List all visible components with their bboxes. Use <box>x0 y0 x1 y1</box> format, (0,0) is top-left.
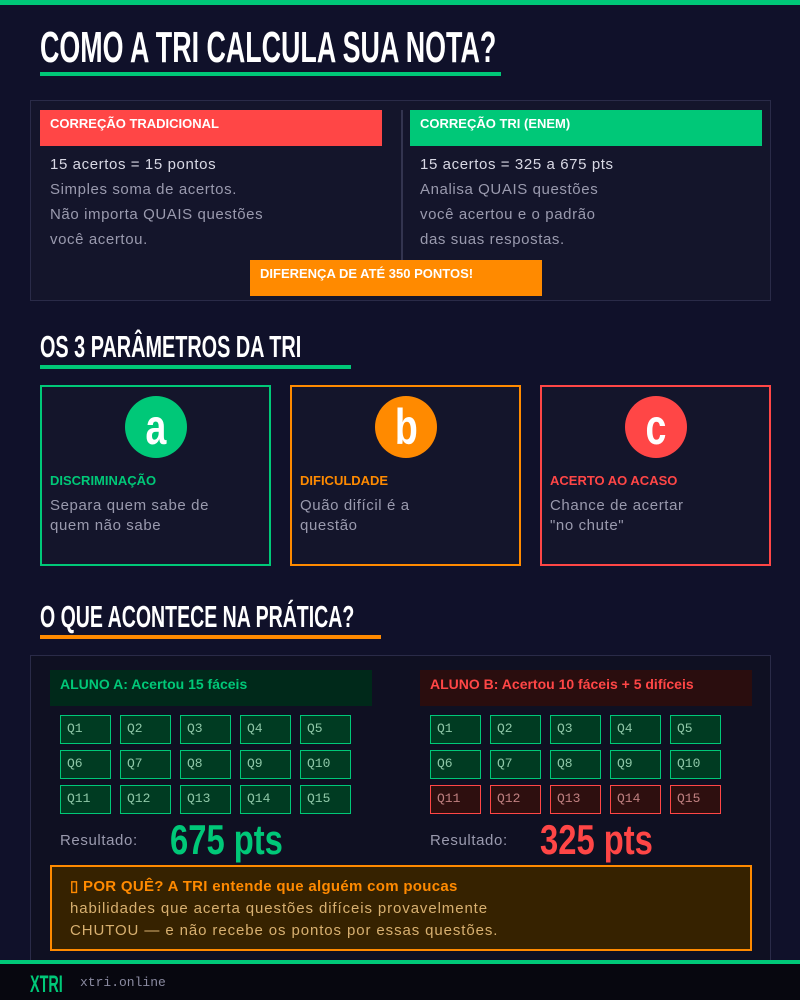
grid: aluno B: Q4 <box>617 721 633 736</box>
card: a: Separa quem sabe de <box>50 497 209 514</box>
grid: aluno B: Q9 <box>617 756 633 771</box>
result: aluno A: 675 pts <box>170 816 283 863</box>
header: TRI <box>410 110 762 146</box>
header: traditional: CORREÇÃO TRADICIONAL <box>50 116 219 131</box>
grid: aluno B: Q11 <box>437 791 460 806</box>
grid: aluno A: Q2 <box>127 721 143 736</box>
footer: xtri.online <box>80 975 166 990</box>
card: a: quem não sabe <box>50 517 161 534</box>
header: aluno A <box>50 670 372 706</box>
grid: aluno A: Q12 <box>127 791 150 806</box>
callout: why: habilidades que acerta questões difíceis provavelmente <box>70 900 488 917</box>
text: TRI: você acertou e o padrão <box>420 206 596 223</box>
grid: aluno B: Q1 <box>437 721 453 736</box>
text: TRI: das suas respostas. <box>420 231 565 248</box>
text: traditional: Não importa QUAIS questões <box>50 206 263 223</box>
callout: difference <box>250 260 542 296</box>
result: aluno B: Resultado: <box>430 832 508 849</box>
card: c <box>540 385 771 566</box>
card: b: Quão difícil é a <box>300 497 410 514</box>
grid: aluno B: Q15 <box>677 791 700 806</box>
footer: XTRI <box>30 971 63 998</box>
header: aluno A: ALUNO A: Acertou 15 fáceis <box>60 676 247 692</box>
icon: c <box>625 396 687 458</box>
text: traditional: você acertou. <box>50 231 148 248</box>
grid: aluno A: Q6 <box>67 756 83 771</box>
card: b: DIFICULDADE <box>300 473 388 488</box>
grid: aluno A: Q4 <box>247 721 263 736</box>
card: c: Chance de acertar <box>550 497 684 514</box>
text: TRI <box>420 156 614 248</box>
heading: parameters: OS 3 PARÂMETROS DA TRI <box>40 329 301 364</box>
text: traditional: 15 acertos = 15 pontos <box>50 156 216 173</box>
grid: aluno A: Q11 <box>67 791 90 806</box>
text: TRI: Analisa QUAIS questões <box>420 181 598 198</box>
grid: aluno A: Q3 <box>187 721 203 736</box>
grid: aluno A: Q10 <box>307 756 330 771</box>
card: b <box>290 385 521 566</box>
result: aluno B: 325 pts <box>540 816 653 863</box>
card: a: DISCRIMINAÇÃO <box>50 473 156 488</box>
grid: aluno B: Q10 <box>677 756 700 771</box>
icon: b <box>375 396 437 458</box>
grid: aluno B: Q12 <box>497 791 520 806</box>
footer <box>0 960 800 1000</box>
grid: aluno A: Q8 <box>187 756 203 771</box>
callout: difference: DIFERENÇA DE ATÉ 350 PONTOS! <box>260 266 473 281</box>
grid: aluno B: Q8 <box>557 756 573 771</box>
grid: aluno A: Q9 <box>247 756 263 771</box>
grid: aluno B: Q14 <box>617 791 640 806</box>
grid: aluno A: Q5 <box>307 721 323 736</box>
grid: aluno A: Q13 <box>187 791 210 806</box>
result: aluno A: Resultado: <box>60 832 138 849</box>
callout: why <box>50 865 752 951</box>
text: traditional <box>50 156 263 248</box>
grid: aluno B: Q13 <box>557 791 580 806</box>
grid: aluno A: Q1 <box>67 721 83 736</box>
card: b: questão <box>300 517 358 534</box>
grid: aluno A: Q7 <box>127 756 143 771</box>
card: c: "no chute" <box>550 517 624 534</box>
panel: comparison <box>30 100 771 301</box>
grid: aluno A <box>60 715 351 814</box>
grid: aluno B: Q5 <box>677 721 693 736</box>
icon: a: a <box>146 399 166 455</box>
grid: aluno B <box>430 715 721 814</box>
card: c: ACERTO AO ACASO <box>550 473 677 488</box>
header: traditional <box>40 110 382 146</box>
icon: a <box>125 396 187 458</box>
header: TRI: CORREÇÃO TRI (ENEM) <box>420 116 570 131</box>
grid: aluno B: Q7 <box>497 756 513 771</box>
result: aluno A <box>60 816 283 863</box>
title: COMO A TRI CALCULA SUA NOTA? <box>40 23 496 72</box>
icon: c: c <box>646 399 666 455</box>
grid: aluno B: Q2 <box>497 721 513 736</box>
callout: why: CHUTOU — e não recebe os pontos por essas questões. <box>70 922 498 939</box>
grid: aluno A: Q15 <box>307 791 330 806</box>
header: aluno B: ALUNO B: Acertou 10 fáceis + 5 difíceis <box>430 676 694 692</box>
text: TRI: 15 acertos = 325 a 675 pts <box>420 156 614 173</box>
panel: practice <box>30 655 771 975</box>
icon: b: b <box>395 399 417 455</box>
result: aluno B <box>430 816 653 863</box>
text: traditional: Simples soma de acertos. <box>50 181 237 198</box>
grid: aluno B: Q6 <box>437 756 453 771</box>
heading: practice: O QUE ACONTECE NA PRÁTICA? <box>40 599 354 634</box>
header: aluno B <box>420 670 752 706</box>
callout: why: ▯ POR QUÊ? A TRI entende que alguém com poucas <box>70 878 458 895</box>
grid: aluno B: Q3 <box>557 721 573 736</box>
card: a <box>40 385 271 566</box>
grid: aluno A: Q14 <box>247 791 270 806</box>
